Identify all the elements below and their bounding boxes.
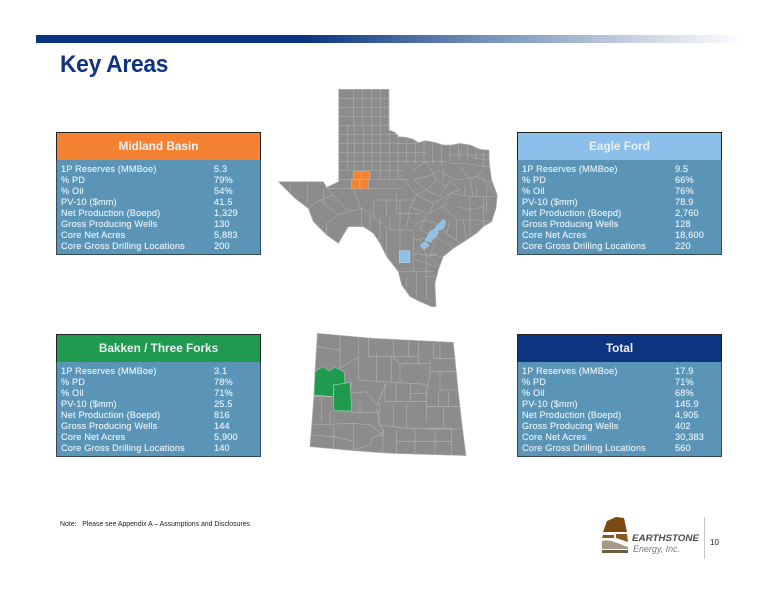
table: Bakken metrics: 1P Reserves (MMBoe) [61, 366, 157, 376]
table: Eagle Ford metrics: 2,760 [675, 208, 699, 218]
table: Total metrics: % PD [522, 377, 546, 387]
heading: Total [517, 334, 722, 363]
table: Total metrics [517, 362, 722, 457]
panel: Midland Basin [56, 132, 261, 255]
table: Bakken metrics: Net Production (Boepd) [61, 410, 160, 420]
page number: 10 [710, 538, 719, 547]
footnote: Note: Please see Appendix A – Assumptions and Disclosures [60, 521, 250, 528]
table: Total metrics: 17.9 [675, 366, 693, 376]
table: Midland Basin metrics: 5.3 [214, 164, 227, 174]
panel: Eagle Ford [517, 132, 722, 255]
heading: Bakken / Three Forks [56, 334, 261, 363]
icon: Earthstone logo: Energy, Inc. [633, 544, 680, 554]
table: Midland Basin metrics [56, 160, 261, 255]
table: Total metrics: Core Net Acres [522, 432, 586, 442]
table: Midland Basin metrics: Net Production (Boepd) [61, 208, 160, 218]
table: Midland Basin metrics: 200 [214, 241, 230, 251]
table: Total metrics: 1P Reserves (MMBoe) [522, 366, 618, 376]
table: Bakken metrics: 140 [214, 443, 230, 453]
table: Total metrics: Gross Producing Wells [522, 421, 618, 431]
table: Total metrics: 71% [675, 377, 694, 387]
county lines [290, 89, 497, 300]
table: Midland Basin metrics: Core Gross Drilling Locations [61, 241, 185, 251]
table: Total metrics: 68% [675, 388, 694, 398]
table: Eagle Ford metrics: 78.9 [675, 197, 693, 207]
title: Key Areas [60, 51, 168, 78]
table: Total metrics: % Oil [522, 388, 545, 398]
table: Bakken metrics: 78% [214, 377, 233, 387]
table: Midland Basin metrics: 41.5 [214, 197, 232, 207]
table: Eagle Ford metrics: 128 [675, 219, 691, 229]
top gradient bar [36, 35, 744, 43]
logo divider [704, 517, 705, 559]
heading: Midland Basin [56, 132, 261, 161]
map: Texas [278, 89, 498, 307]
table: Midland Basin metrics: Core Net Acres [61, 230, 125, 240]
table: Bakken metrics: Core Net Acres [61, 432, 125, 442]
table: Bakken metrics: Gross Producing Wells [61, 421, 157, 431]
table: Eagle Ford metrics: % PD [522, 175, 546, 185]
table: Midland Basin metrics: PV-10 ($mm) [61, 197, 117, 207]
county lines [312, 336, 462, 455]
heading: Bakken / Three Forks: Bakken / Three Forks [99, 341, 218, 355]
map: North Dakota [310, 333, 466, 456]
table: Bakken metrics: 71% [214, 388, 233, 398]
table: Eagle Ford metrics: Gross Producing Wells [522, 219, 618, 229]
table: Total metrics: 402 [675, 421, 691, 431]
table: Eagle Ford metrics: Net Production (Boepd) [522, 208, 621, 218]
table: Midland Basin metrics: % Oil [61, 186, 84, 196]
table: Total metrics: 560 [675, 443, 691, 453]
table: Bakken metrics: Core Gross Drilling Locations [61, 443, 185, 453]
table: Eagle Ford metrics: 76% [675, 186, 694, 196]
table: Bakken metrics: % Oil [61, 388, 84, 398]
table: Bakken metrics: 5,900 [214, 432, 238, 442]
table: Bakken metrics: 144 [214, 421, 230, 431]
table: Eagle Ford metrics [517, 160, 722, 255]
table: Total metrics: Net Production (Boepd) [522, 410, 621, 420]
panel: Total [517, 334, 722, 457]
Midland Basin counties [351, 172, 370, 189]
Eagle Ford counties [399, 219, 446, 263]
heading: Eagle Ford [517, 132, 722, 161]
table: Bakken metrics: 25.5 [214, 399, 232, 409]
table: Bakken metrics: 3.1 [214, 366, 227, 376]
panel: Bakken / Three Forks [56, 334, 261, 457]
table: Bakken metrics: % PD [61, 377, 85, 387]
table: Eagle Ford metrics: % Oil [522, 186, 545, 196]
table: Total metrics: 145.9 [675, 399, 699, 409]
table: Eagle Ford metrics: Core Gross Drilling Locations [522, 241, 646, 251]
table: Midland Basin metrics: 1,329 [214, 208, 238, 218]
icon: Earthstone logo: EARTHSTONE [632, 532, 700, 543]
table: Eagle Ford metrics: 1P Reserves (MMBoe) [522, 164, 618, 174]
table: Eagle Ford metrics: 18,600 [675, 230, 704, 240]
table: Eagle Ford metrics: 220 [675, 241, 691, 251]
table: Midland Basin metrics: 130 [214, 219, 230, 229]
table: Total metrics: 4,905 [675, 410, 699, 420]
table: Bakken metrics: PV-10 ($mm) [61, 399, 117, 409]
table: Midland Basin metrics: 54% [214, 186, 233, 196]
table: Total metrics: PV-10 ($mm) [522, 399, 578, 409]
table: Total metrics: Core Gross Drilling Locations [522, 443, 646, 453]
table: Midland Basin metrics: 5,883 [214, 230, 238, 240]
table: Eagle Ford metrics: PV-10 ($mm) [522, 197, 578, 207]
heading: Total: Total [606, 341, 633, 355]
table: Total metrics: 30,383 [675, 432, 704, 442]
table: Midland Basin metrics: % PD [61, 175, 85, 185]
table: Bakken metrics: 816 [214, 410, 230, 420]
heading: Midland Basin: Midland Basin [119, 139, 198, 153]
table: Eagle Ford metrics: 9.5 [675, 164, 688, 174]
icon: Earthstone logo [602, 517, 700, 554]
table: Bakken metrics [56, 362, 261, 457]
table: Eagle Ford metrics: Core Net Acres [522, 230, 586, 240]
table: Midland Basin metrics: 79% [214, 175, 233, 185]
Bakken counties [314, 367, 345, 397]
heading: Eagle Ford: Eagle Ford [589, 139, 650, 153]
table: Midland Basin metrics: Gross Producing Wells [61, 219, 157, 229]
table: Eagle Ford metrics: 66% [675, 175, 694, 185]
table: Midland Basin metrics: 1P Reserves (MMBoe) [61, 164, 157, 174]
